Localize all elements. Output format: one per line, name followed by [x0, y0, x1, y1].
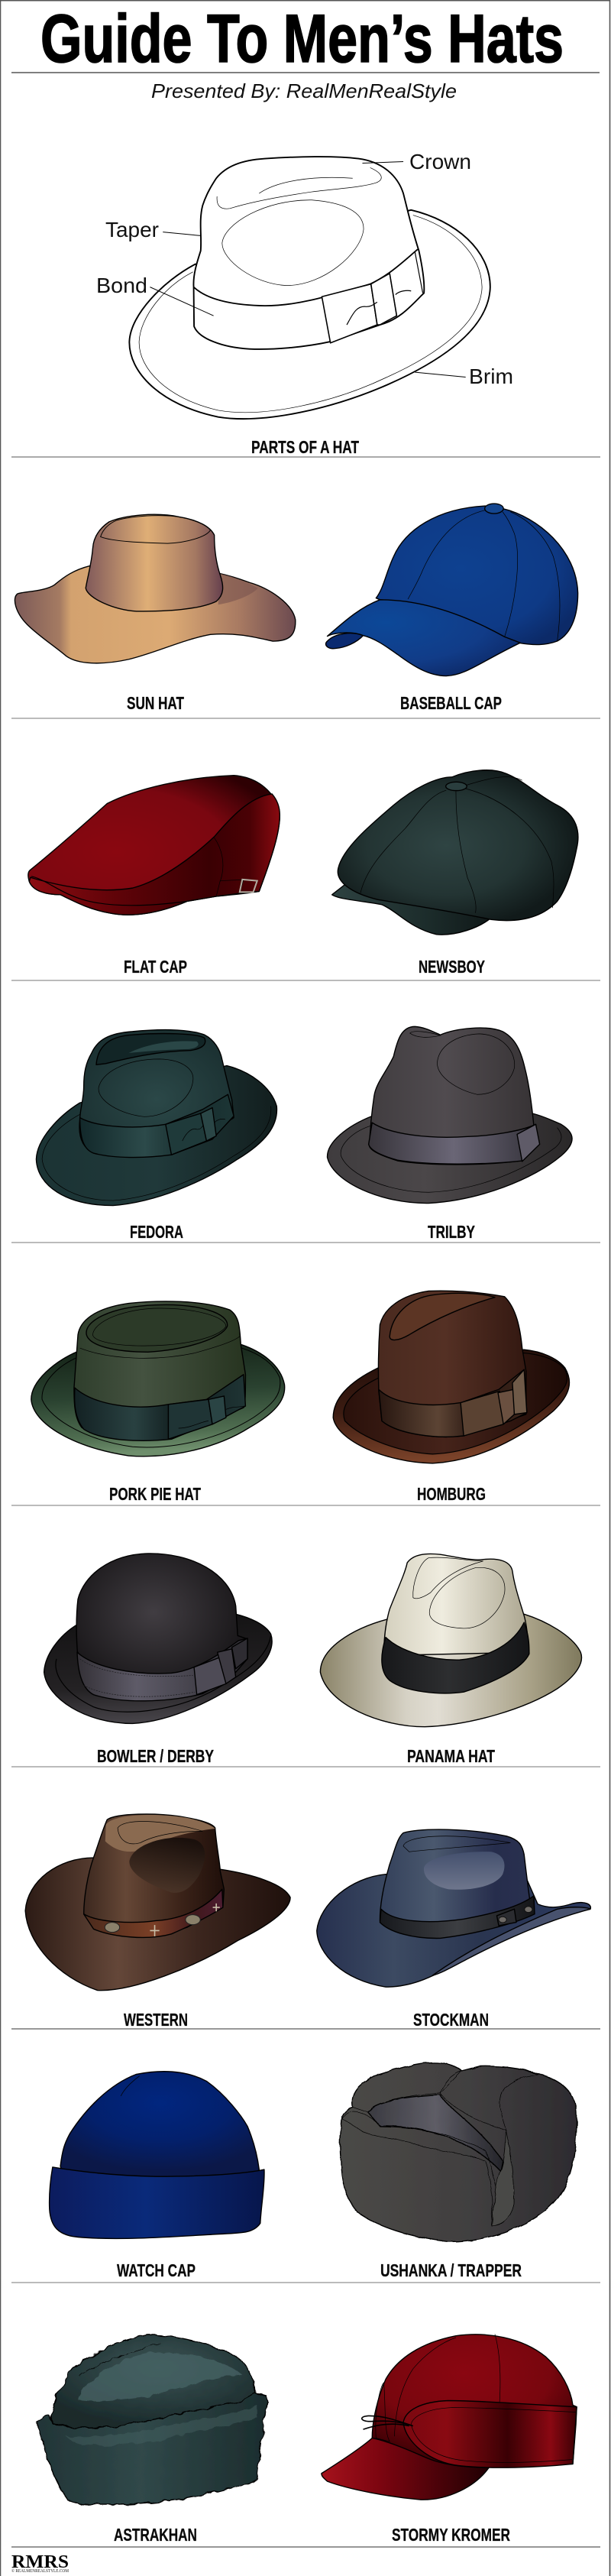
illustration: stockman — [317, 1829, 590, 1987]
illustration: fedora — [36, 1030, 276, 1206]
illustration: pork pie hat — [31, 1301, 285, 1456]
label: watch cap: WATCH CAP — [117, 2260, 196, 2280]
panel: watch cap — [50, 2072, 264, 2280]
panel: pork pie hat — [31, 1301, 285, 1504]
panel: bowler / derby — [44, 1554, 272, 1766]
label: sun hat: SUN HAT — [127, 693, 184, 713]
label: baseball cap: BASEBALL CAP — [400, 693, 502, 713]
panel: astrakhan — [37, 2335, 267, 2545]
callout: taper: Taper — [105, 218, 159, 241]
illustration: trilby — [328, 1026, 572, 1204]
panel: panama hat — [320, 1554, 581, 1766]
illustration: ushanka — [340, 2062, 577, 2241]
callout: crown: Crown — [409, 150, 471, 173]
label: flat cap: FLAT CAP — [124, 957, 187, 977]
label: stormy kromer: STORMY KROMER — [392, 2525, 510, 2545]
logo: RMRS — [11, 2552, 69, 2574]
illustration: homburg — [333, 1291, 569, 1463]
panel: ushanka / trapper — [340, 2062, 577, 2280]
panel: fedora — [36, 1030, 276, 1242]
panel: newsboy — [332, 770, 578, 977]
illustration: sun hat — [15, 514, 296, 663]
panel: homburg — [333, 1291, 569, 1504]
illustration: newsboy — [332, 770, 578, 935]
callout: brim: Brim — [469, 365, 513, 388]
illustration: bowler — [44, 1554, 272, 1723]
illustration: flat cap — [28, 776, 280, 915]
illustration: western — [25, 1814, 290, 1991]
panel: parts of a hat — [96, 150, 513, 457]
illustration: labelled hat diagram — [129, 157, 490, 419]
illustration: panama hat — [320, 1554, 581, 1727]
panel: western — [25, 1814, 290, 2030]
panel: trilby — [328, 1026, 572, 1242]
label: bowler / derby: BOWLER / DERBY — [97, 1746, 214, 1766]
panel: stormy kromer — [322, 2334, 577, 2545]
label: homburg: HOMBURG — [417, 1484, 486, 1504]
label: pork pie hat: PORK PIE HAT — [109, 1484, 201, 1504]
callout: bond: Bond — [96, 274, 147, 297]
label: western: WESTERN — [124, 2010, 188, 2030]
illustration: stormy kromer — [322, 2334, 577, 2500]
label: panama hat: PANAMA HAT — [407, 1746, 495, 1766]
label: astrakhan: ASTRAKHAN — [114, 2525, 197, 2545]
label: ushanka / trapper: USHANKA / TRAPPER — [380, 2260, 522, 2280]
illustration: baseball cap — [326, 504, 578, 676]
panel: sun hat — [15, 514, 296, 713]
label: fedora: FEDORA — [130, 1222, 183, 1242]
illustration: astrakhan — [37, 2335, 267, 2505]
illustration: watch cap — [50, 2072, 264, 2238]
label: newsboy: NEWSBOY — [419, 957, 485, 977]
label: parts of a hat: PARTS OF A HAT — [251, 437, 359, 457]
panel: stockman — [317, 1829, 590, 2030]
subtitle: Presented By: RealMenRealStyle — [151, 79, 457, 102]
logo caption: © REALMENREALSTYLE.COM — [11, 2568, 69, 2574]
logo wordmark: RMRS — [11, 2552, 69, 2572]
label: stockman: STOCKMAN — [413, 2010, 489, 2030]
panel: flat cap — [28, 776, 280, 977]
panel: baseball cap — [326, 504, 578, 713]
label: trilby: TRILBY — [428, 1222, 475, 1242]
